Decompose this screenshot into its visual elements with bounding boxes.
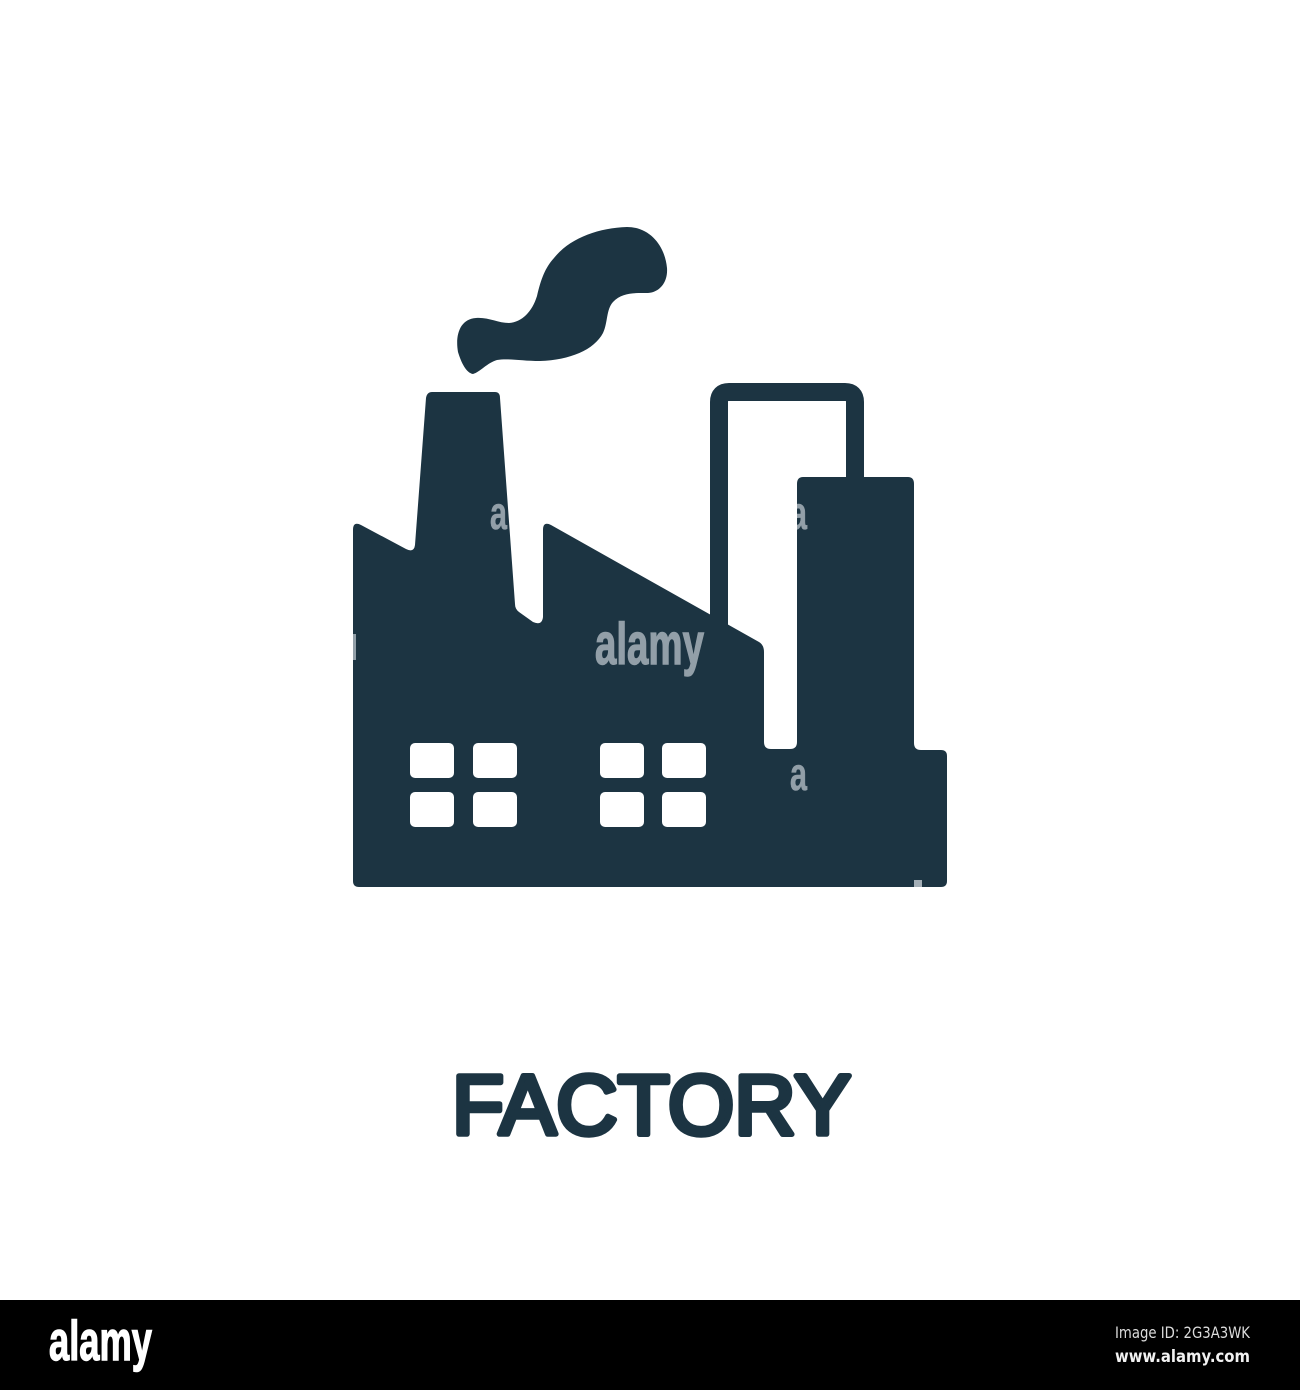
icon: right window group [600,743,706,827]
watermark: small a on base: a [790,748,807,800]
icon: overhead pipe [719,392,855,640]
watermark: left edge fragment [353,634,356,660]
icon: main building with chimney [353,392,947,887]
watermark: small a on chimney: a [490,487,507,539]
title: FACTORY [452,1058,851,1152]
watermark: alamy centre: alamy [595,612,704,677]
image id: Image ID: 2G3A3WK [1115,1323,1250,1342]
watermark: bottom fragment [914,880,922,887]
footer bar [0,1300,1300,1390]
watermark: small a on tower: a [790,487,807,539]
footer logo: alamy [49,1309,152,1372]
icon: left window group [410,743,517,827]
icon: smoke plume [457,227,667,374]
icon: factory [353,227,947,887]
website: www.alamy.com [1115,1347,1250,1367]
